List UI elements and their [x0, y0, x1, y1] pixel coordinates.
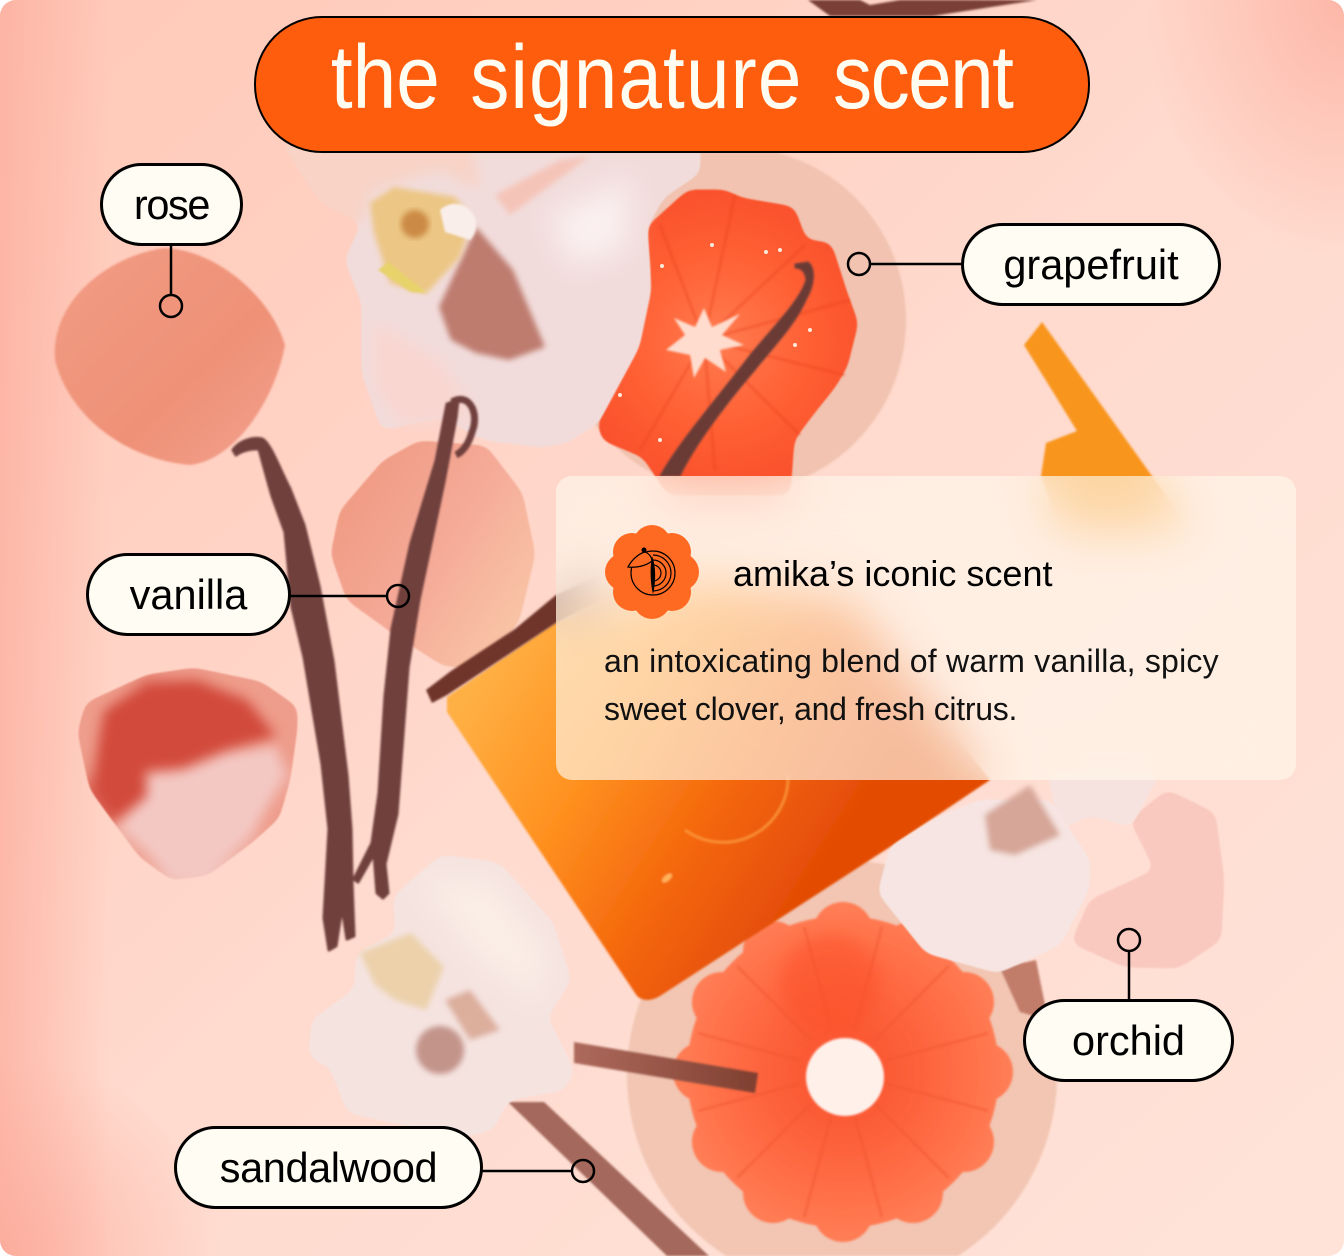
rose petal centre: [331, 441, 535, 668]
rose petal top left: [55, 248, 285, 465]
sandalwood sticks: [574, 1042, 758, 1093]
info card: [556, 476, 1296, 780]
icon: flower badge with citrus: [605, 525, 699, 619]
label: rose: [100, 163, 243, 246]
upper orchid: [280, 140, 700, 447]
bottle embossed ring: [685, 775, 788, 842]
label: rose: rose: [134, 180, 209, 228]
orange bottle: [447, 580, 990, 1000]
sandalwood stick behind orchid: [1000, 960, 1048, 1020]
grapefruit centre hole: [806, 1038, 884, 1116]
label: orchid: orchid: [1072, 1016, 1185, 1064]
connector: vanilla: [289, 585, 409, 607]
label: sandalwood: sandalwood: [220, 1144, 437, 1190]
label: sandalwood: [174, 1126, 483, 1209]
title: the signature scent: [331, 28, 1013, 128]
orange shard top right: [1024, 322, 1190, 530]
card body text: an intoxicating blend of warm vanilla, spicy: [604, 643, 1219, 679]
orchid lower left: [309, 855, 574, 1137]
label: vanilla: [86, 553, 291, 636]
lower grapefruit: [627, 860, 1057, 1256]
vanilla pods: [233, 262, 813, 950]
connector: orchid: [1118, 929, 1140, 1001]
card body text: [604, 643, 1219, 727]
orchid lower right: [878, 770, 1224, 973]
card heading: amika’s iconic scent: [733, 553, 1052, 594]
connector: rose: [160, 245, 182, 317]
connector: grapefruit: [848, 253, 962, 275]
bottle cap edge: [426, 575, 600, 703]
upper grapefruit: [560, 147, 906, 495]
grapefruit core star: [666, 308, 744, 378]
title: [254, 16, 1090, 153]
lower grapefruit flesh segments: [673, 902, 1013, 1242]
rose petal lower left: [78, 668, 297, 880]
upper grapefruit flesh: [598, 190, 858, 495]
label: orchid: [1023, 999, 1234, 1082]
label: grapefruit: grapefruit: [1003, 240, 1179, 288]
label: grapefruit: [961, 223, 1221, 306]
top vanilla fragment: [808, 0, 1037, 16]
label: vanilla: vanilla: [130, 570, 247, 618]
connector: sandalwood: [482, 1160, 594, 1182]
card body text: sweet clover, and fresh citrus.: [604, 691, 1017, 727]
